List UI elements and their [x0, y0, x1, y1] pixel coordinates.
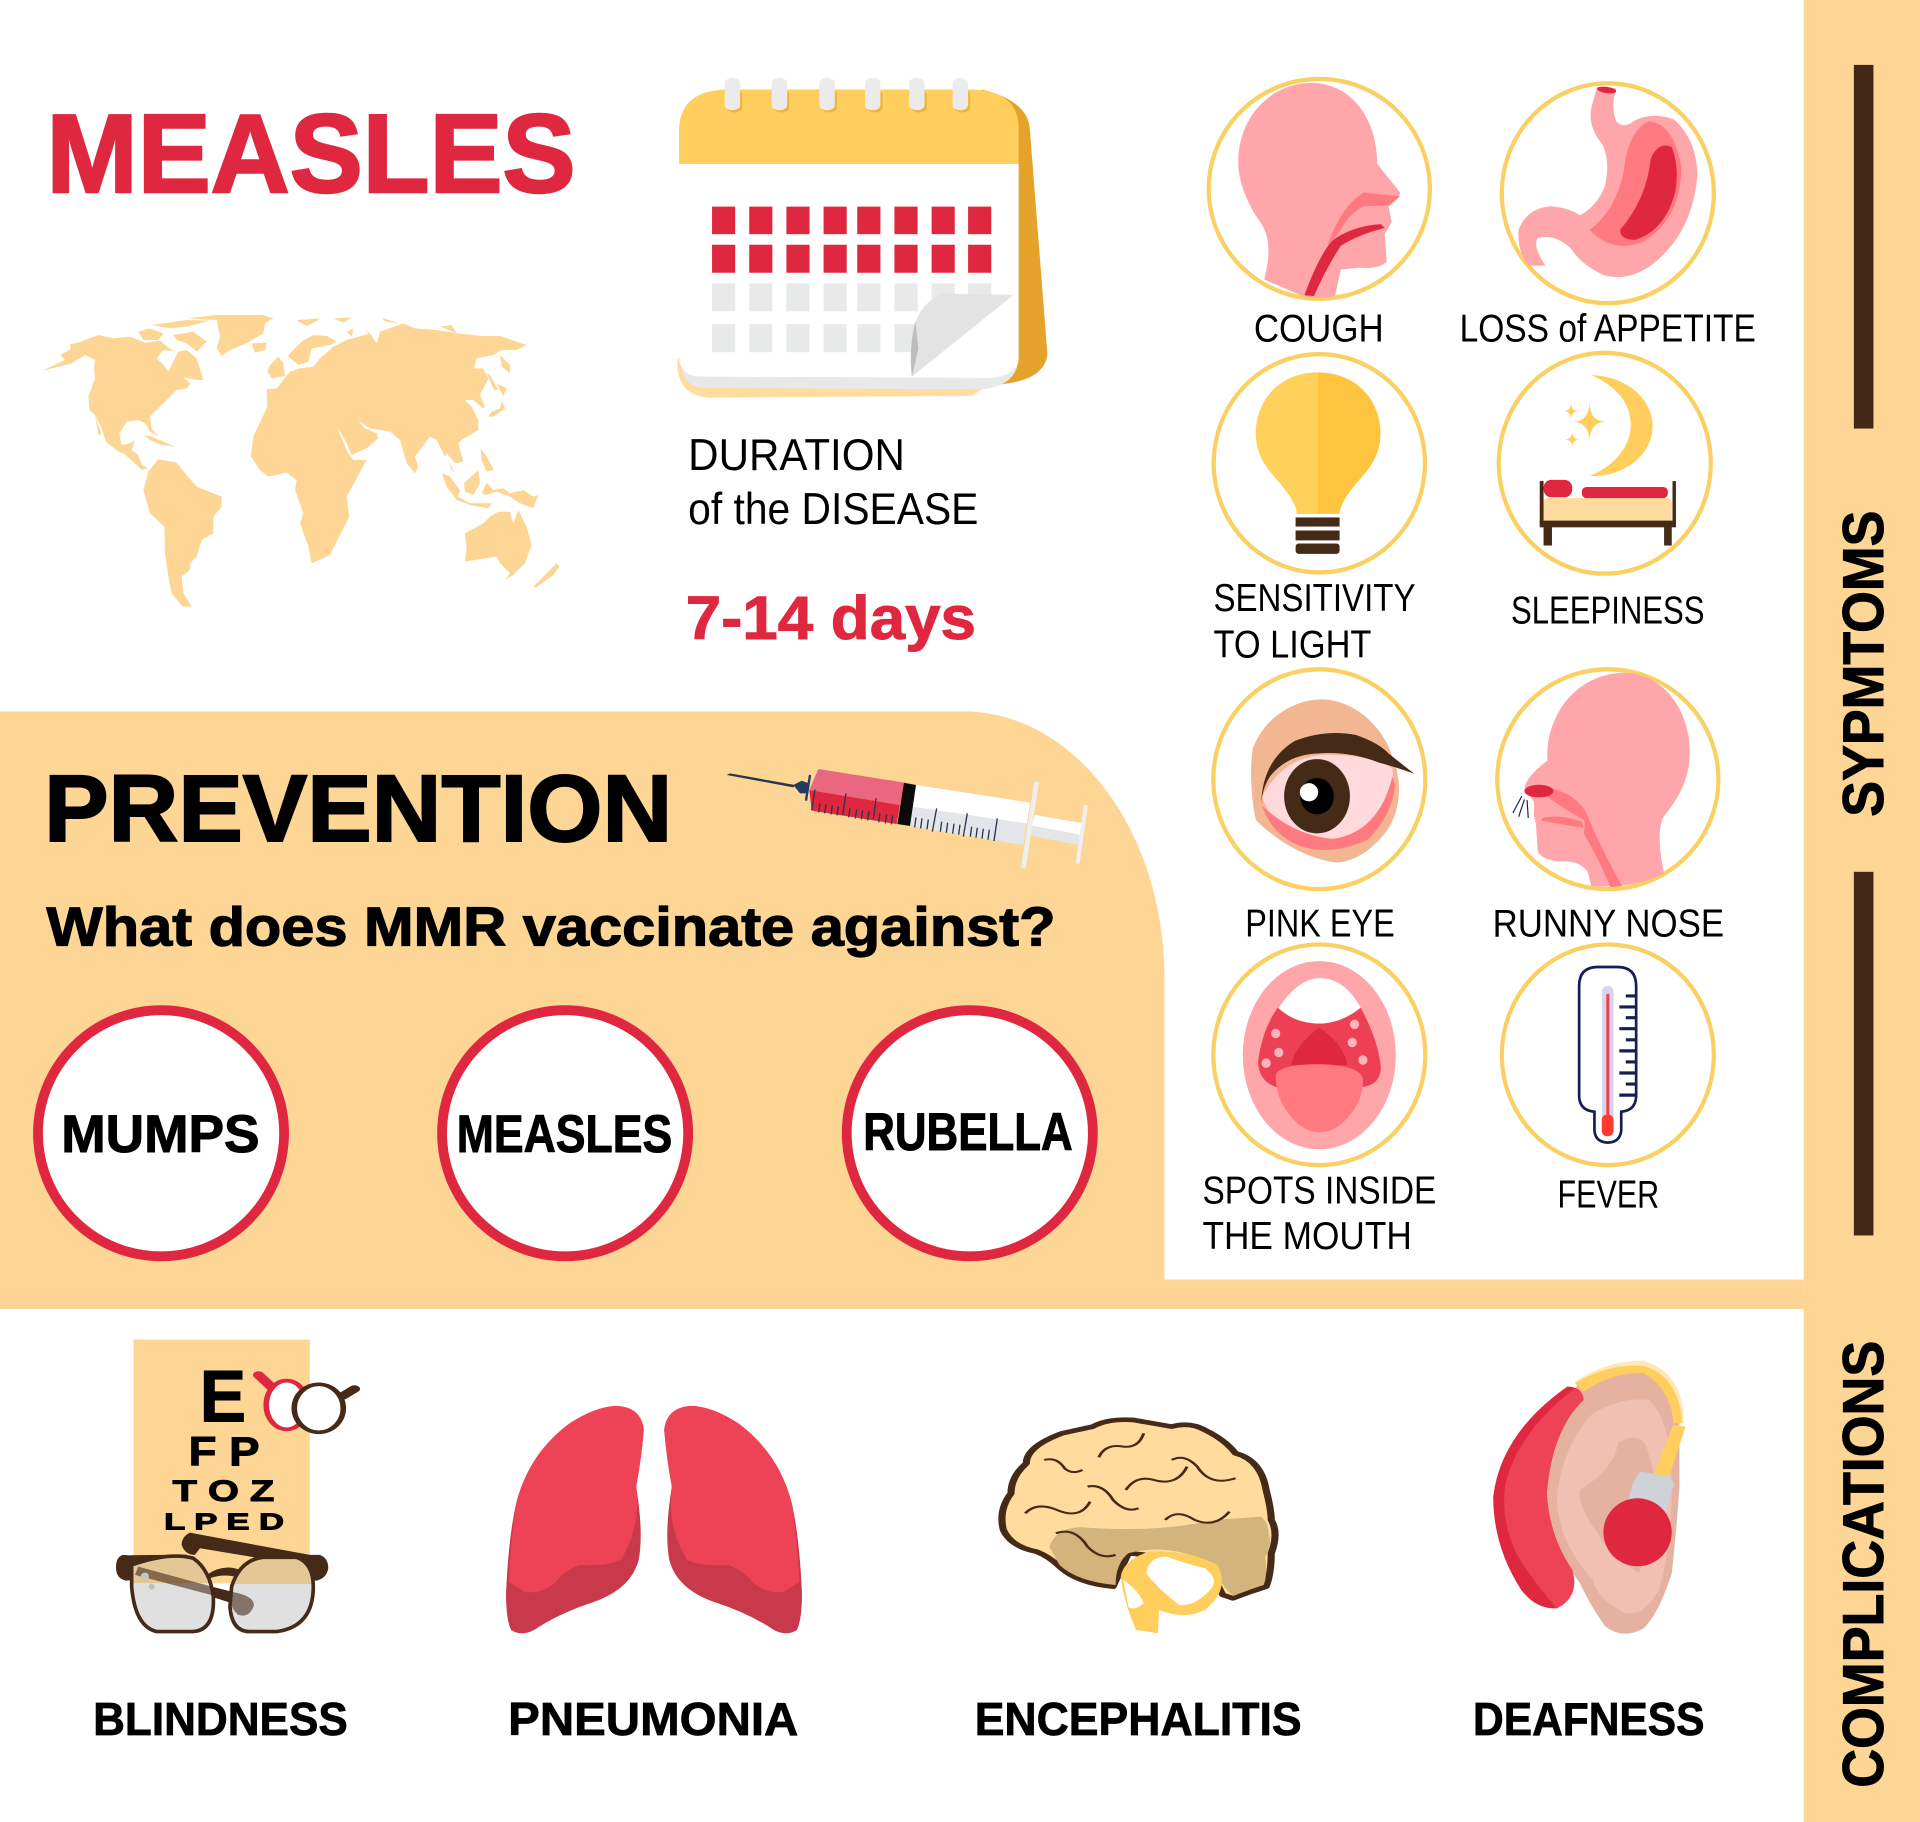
- icon: large glasses: [116, 1533, 328, 1632]
- symptom: runny nose: RUNNY NOSE: [1493, 903, 1724, 946]
- symptom: sleepiness: SLEEPINESS: [1511, 589, 1704, 632]
- icon: eye chart: E: [200, 1355, 246, 1438]
- badge: measles: MEASLES: [457, 1105, 672, 1164]
- panel: symptoms and complications side band: [1804, 0, 1920, 1822]
- symptom: spots inside the mouth: SPOTS INSIDE: [1202, 1170, 1436, 1213]
- text block: duration of the disease: DURATION: [688, 431, 905, 480]
- badge: rubella: RUBELLA: [863, 1103, 1073, 1162]
- icon: brain: [1002, 1420, 1275, 1633]
- title: MEASLES: [47, 91, 576, 216]
- symptom: sleepiness: [1499, 353, 1711, 632]
- complication: deafness: DEAFNESS: [1473, 1693, 1704, 1745]
- icon: eye chart: F P: [189, 1429, 260, 1475]
- complication: encephalitis: ENCEPHALITIS: [975, 1693, 1302, 1745]
- symptom: loss of appetite: [1460, 83, 1756, 351]
- symptom: fever: FEVER: [1558, 1173, 1659, 1216]
- icon: eye chart: [133, 1340, 310, 1583]
- symptom: loss of appetite: LOSS of APPETITE: [1460, 308, 1756, 351]
- symptom: cough: COUGH: [1254, 308, 1384, 351]
- icon: eye chart: T O Z: [173, 1475, 274, 1508]
- symptom: sensitivity to light: [1213, 354, 1425, 667]
- complication: pneumonia: PNEUMONIA: [508, 1693, 798, 1745]
- symptom: cough: [1209, 79, 1430, 351]
- complication: pneumonia: [506, 1406, 802, 1745]
- text block: duration of the disease: [688, 431, 978, 534]
- badge: rubella: [847, 1010, 1093, 1256]
- symptom: sensitivity to light: TO LIGHT: [1213, 624, 1371, 667]
- symptom: runny nose: [1493, 669, 1724, 946]
- symptom: sensitivity to light: SENSITIVITY: [1213, 577, 1416, 620]
- icon: syringe: [727, 769, 1086, 868]
- icon: lungs: [506, 1406, 802, 1633]
- badge: measles: [442, 1010, 688, 1256]
- complication: blindness: BLINDNESS: [93, 1693, 348, 1745]
- icon: eye chart: L P E D: [164, 1508, 284, 1534]
- badge: mumps: [38, 1010, 284, 1256]
- panel: symptoms and complications side band: COMPLICATIONS: [1832, 1341, 1896, 1788]
- duration value: 7-14 days: [686, 584, 976, 652]
- text block: duration of the disease: of the DISEASE: [688, 485, 978, 534]
- heading: prevention: PREVENTION: [44, 756, 672, 861]
- icon: small round glasses: [259, 1375, 354, 1432]
- icon: world map: [43, 315, 559, 607]
- symptom: spots inside the mouth: [1202, 945, 1436, 1258]
- complication: blindness: [93, 1340, 354, 1745]
- icon: calendar: [677, 78, 1047, 398]
- symptom: spots inside the mouth: THE MOUTH: [1202, 1215, 1412, 1258]
- question text: What does MMR vaccinate against?: [47, 895, 1056, 957]
- complication: encephalitis: [975, 1420, 1302, 1745]
- panel: prevention: [0, 711, 1804, 1309]
- panel: symptoms and complications side band: SYPMTOMS: [1832, 511, 1896, 817]
- badge: mumps: MUMPS: [61, 1105, 260, 1164]
- symptom: fever: [1502, 945, 1714, 1216]
- symptom: pink eye: PINK EYE: [1245, 903, 1395, 946]
- symptom: pink eye: [1213, 669, 1425, 946]
- icon: ear with hearing aid: [1493, 1361, 1686, 1634]
- complication: deafness: [1473, 1361, 1704, 1745]
